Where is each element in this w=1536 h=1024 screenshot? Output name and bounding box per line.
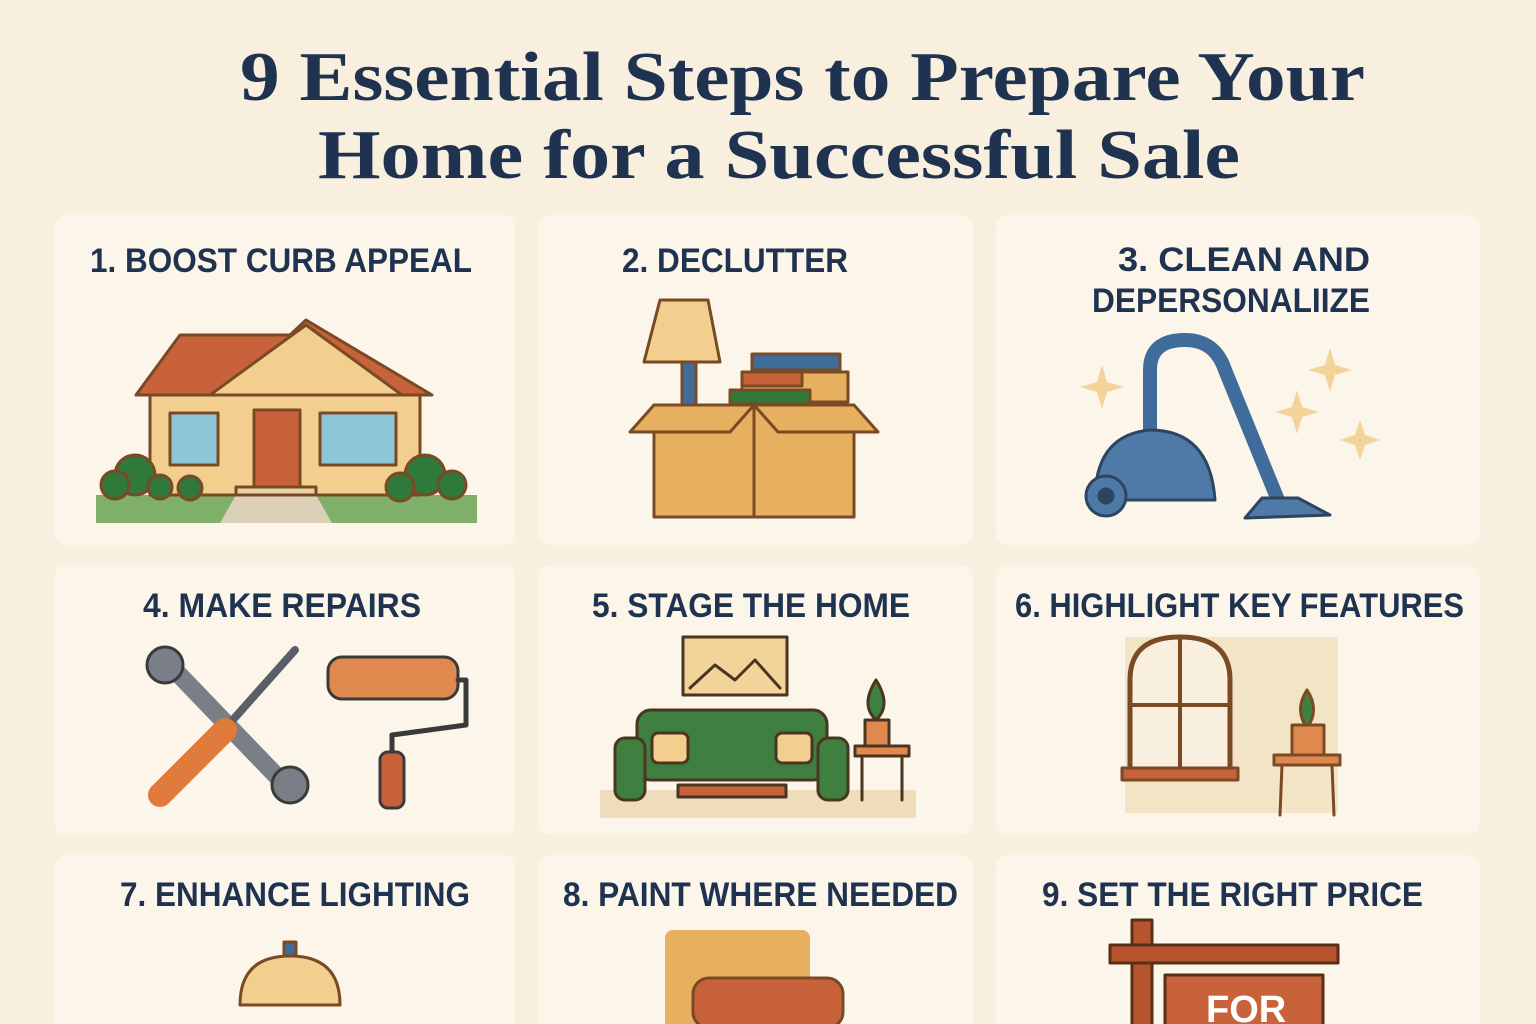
heading: step 7: 7. ENHANCE LIGHTING — [120, 876, 470, 914]
heading: step 5: 5. STAGE THE HOME — [592, 587, 910, 625]
icon: window and plant — [1122, 637, 1340, 815]
icon: box with lamp and books — [630, 300, 878, 517]
heading: step 1: 1. BOOST CURB APPEAL — [90, 242, 472, 280]
heading: step 3: DEPERSONALIIZE — [1092, 282, 1370, 320]
icon: wrench, screwdriver, paint roller — [147, 647, 466, 808]
panel: set the right price — [996, 855, 1480, 1024]
title: Home for a Successful Sale — [318, 117, 1240, 194]
title: 9 Essential Steps to Prepare Your — [240, 39, 1365, 116]
heading: step 4: 4. MAKE REPAIRS — [143, 587, 421, 625]
heading: step 9: 9. SET THE RIGHT PRICE — [1042, 876, 1423, 914]
icon: sofa with art and plant — [600, 637, 916, 818]
icon: house — [96, 320, 477, 523]
panel: highlight key features — [996, 565, 1480, 835]
icon: vacuum cleaner — [1080, 340, 1380, 518]
panel: paint where needed — [538, 855, 973, 1024]
icon: for sale sign — [1110, 920, 1338, 1024]
heading: step 2: 2. DECLUTTER — [622, 242, 848, 280]
panel: clean and depersonalize — [996, 215, 1480, 545]
panel: make repairs — [55, 565, 515, 835]
title — [240, 39, 1365, 194]
panel: declutter — [538, 215, 973, 545]
icon: paint roller on wall — [665, 930, 843, 1024]
panel: stage the home — [538, 565, 973, 835]
heading: step 3: 3. CLEAN AND — [1118, 241, 1370, 279]
panel: boost curb appeal — [55, 215, 515, 545]
heading: step 6: 6. HIGHLIGHT KEY FEATURES — [1015, 587, 1464, 625]
heading: step 8: 8. PAINT WHERE NEEDED — [563, 876, 958, 914]
heading: step 3 — [1092, 241, 1370, 320]
icon: pendant lamp — [240, 942, 340, 1005]
panel: enhance lighting — [55, 855, 515, 1024]
